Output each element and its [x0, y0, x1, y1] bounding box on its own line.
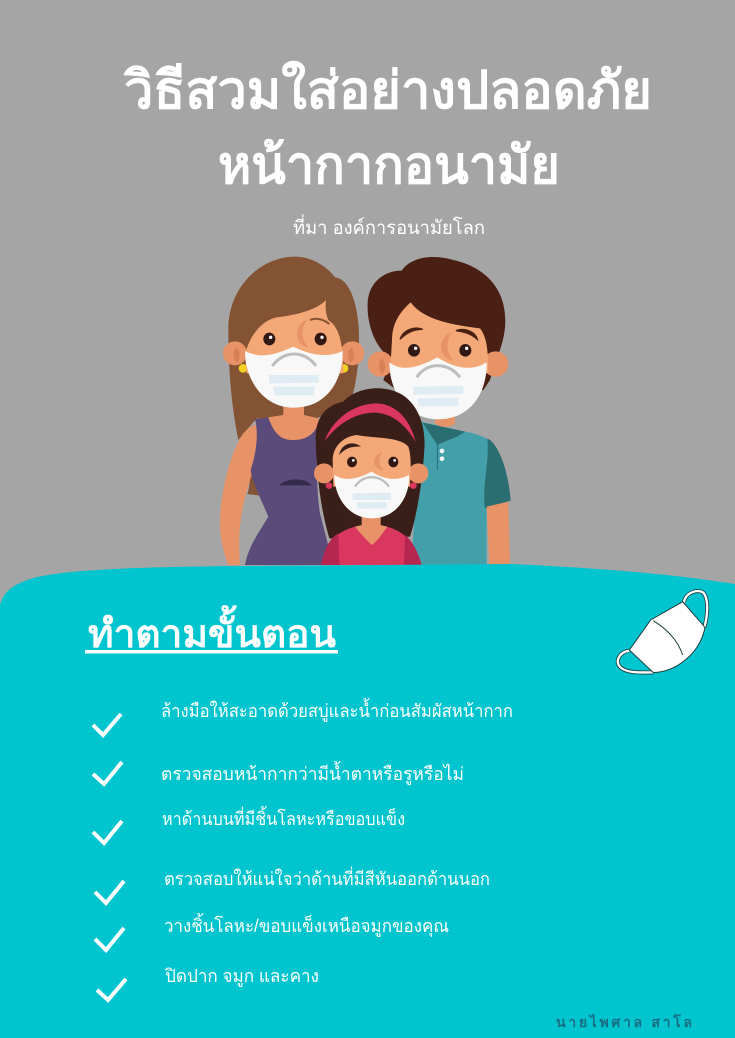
woman's mask: [245, 347, 343, 408]
mask ear loops: [618, 591, 707, 673]
step 5: วางชิ้นโลหะ/ขอบแข็งเหนือจมูกของคุณ: [164, 913, 449, 937]
step 4: [95, 866, 490, 903]
title: วิธีสวมใส่อย่างปลอดภัย: [123, 60, 652, 120]
woman: [220, 257, 364, 565]
source line: ที่มา องค์การอนามัยโลก: [293, 214, 485, 239]
mask body: [629, 602, 705, 673]
title: [123, 60, 652, 195]
title: หน้ากากอนามัย: [218, 137, 560, 195]
author name: นายไพศาล สาโล: [556, 1013, 692, 1030]
step 5: [95, 913, 449, 950]
step 3: [93, 806, 405, 843]
man: [368, 257, 511, 565]
step 2: ตรวจสอบหน้ากากว่ามีน้ำตาหรือรูหรือไม่: [161, 761, 464, 785]
step 2: [93, 761, 464, 785]
girl: [314, 388, 428, 565]
step 1: [93, 698, 513, 735]
step 4: ตรวจสอบให้แน่ใจว่าด้านที่มีสีหันออกด้านนอก: [164, 866, 490, 889]
headband: [324, 403, 416, 442]
illustration: family wearing masks: [220, 257, 511, 565]
step 1: ล้างมือให้สะอาดด้วยสบู่และน้ำก่อนสัมผัสหน้ากาก: [161, 698, 513, 722]
teal panel: [0, 564, 735, 1038]
icon: face mask: [618, 591, 707, 673]
step 6: ปิดปาก จมูก และคาง: [165, 966, 319, 987]
step 6: [97, 966, 319, 1000]
man's mask: [389, 357, 487, 419]
girl's mask: [334, 472, 409, 518]
heading: follow the steps: ทำตามขั้นตอน: [88, 605, 336, 656]
step 3: หาด้านบนที่มีชิ้นโลหะหรือขอบแข็ง: [162, 806, 405, 829]
